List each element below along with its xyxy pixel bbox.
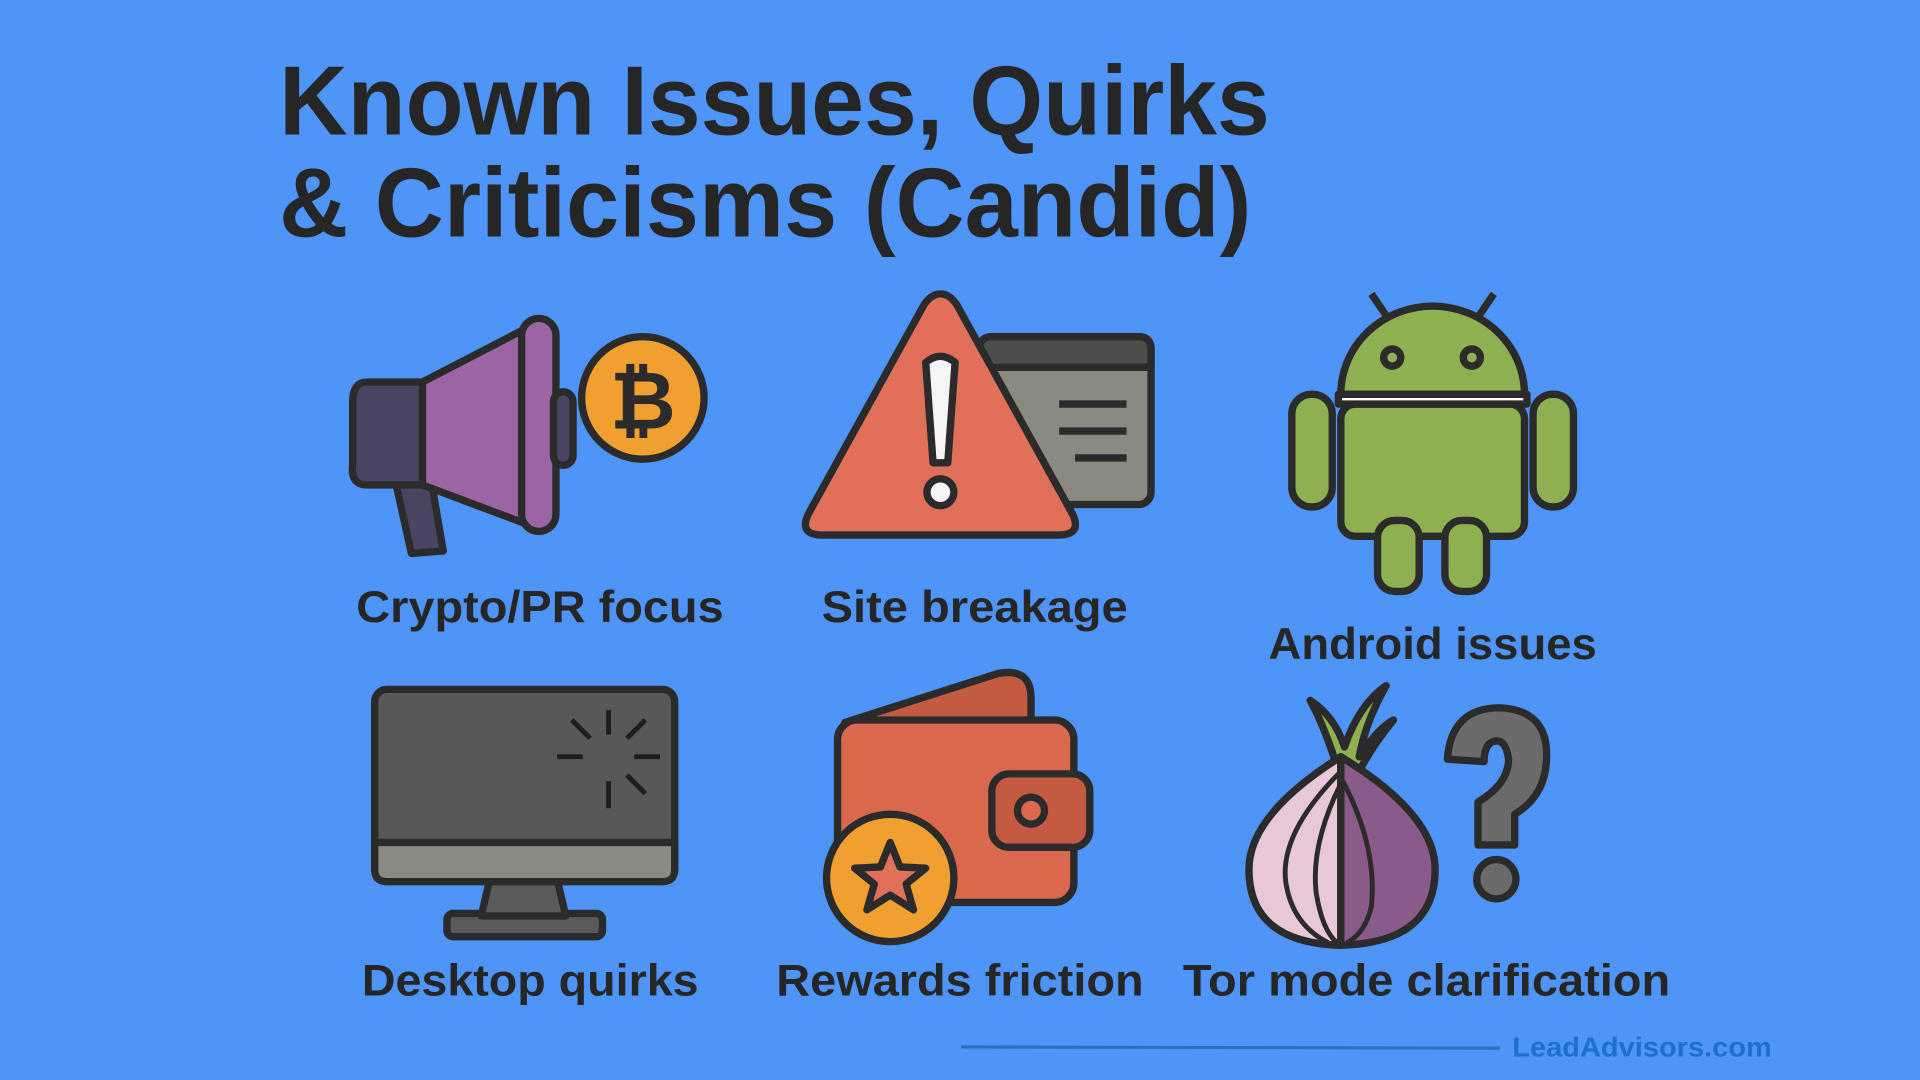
title: & Criticisms (Candid) <box>279 147 1251 257</box>
icon: megaphone with bitcoin: ₿ <box>610 357 676 447</box>
icon: warning with browser <box>805 294 1151 535</box>
icon: wallet with star coin <box>827 672 1090 942</box>
label: site: Site breakage <box>822 583 1128 632</box>
icon: android <box>1292 294 1573 591</box>
label: desktop: Desktop quirks <box>362 957 699 1006</box>
label: tor: Tor mode clarification <box>1183 957 1670 1006</box>
footer: brand: LeadAdvisors.com <box>1512 1032 1772 1063</box>
title: Known Issues, Quirks <box>279 46 1270 156</box>
label: rewards: Rewards friction <box>776 957 1144 1006</box>
icon: onion with question mark <box>1249 686 1547 945</box>
label: crypto: Crypto/PR focus <box>356 583 724 632</box>
title <box>279 46 1270 257</box>
icon: megaphone with bitcoin <box>352 318 704 553</box>
label: android: Android issues <box>1269 620 1597 669</box>
icon: monitor <box>375 689 675 937</box>
